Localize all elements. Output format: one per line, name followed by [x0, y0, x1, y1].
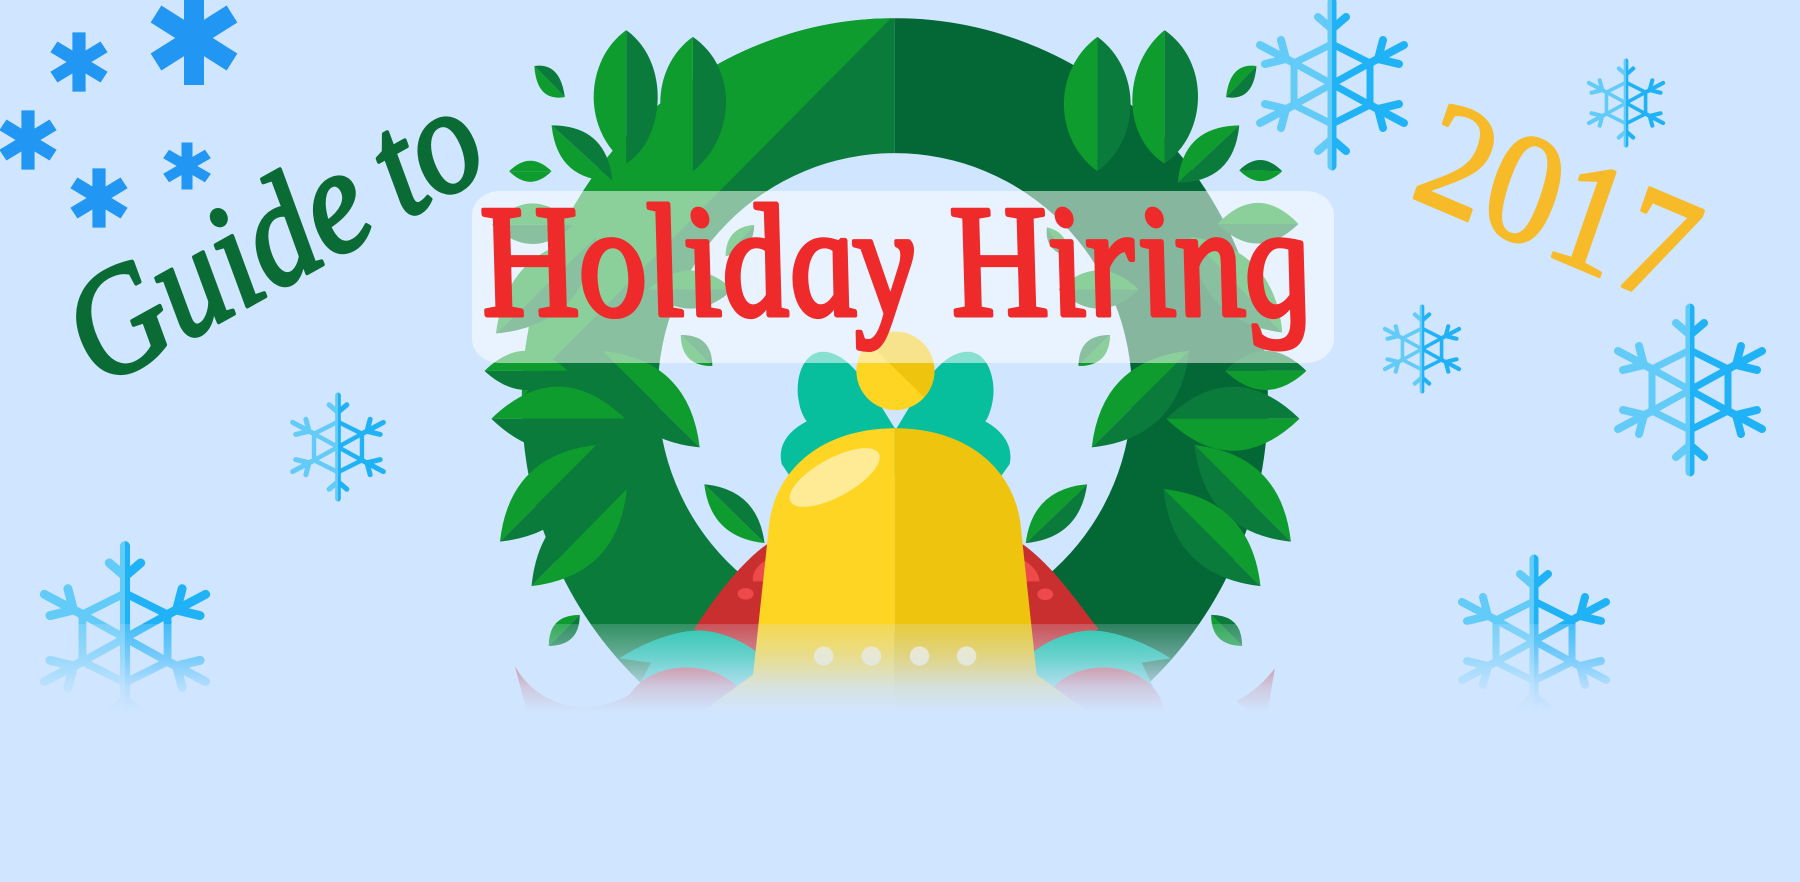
icon: snowflake top right — [1260, 2, 1404, 166]
wreath leaves left — [484, 30, 765, 646]
bottom fade — [0, 624, 1800, 882]
illustration: wreath with bell — [484, 18, 1306, 706]
icon: large asterisk — [156, 0, 232, 85]
heading: 2017: 2017 — [1408, 58, 1710, 347]
icon: asterisk far left — [3, 110, 53, 170]
red ornaments at bottom — [624, 668, 1163, 758]
title: Holiday Hiring: Holiday Hiring — [461, 172, 1324, 350]
bell top ball — [856, 332, 934, 410]
red fabric behind bell — [694, 543, 1099, 658]
bell highlight — [779, 437, 890, 518]
infographic canvas — [0, 0, 1766, 706]
title banner — [472, 191, 1334, 363]
icon: small asterisk — [166, 142, 208, 190]
red arcs at bottom — [515, 666, 1275, 746]
heading: Guide to: Guide to — [36, 54, 510, 417]
icon: snowflake left small — [293, 395, 383, 499]
wreath ring — [522, 18, 1268, 682]
bow — [781, 352, 1010, 476]
icon: asterisk snow cluster — [3, 0, 232, 228]
icon: asterisk top left — [54, 32, 104, 92]
teal wings — [619, 631, 1170, 718]
icon: asterisk lower — [74, 168, 124, 228]
icon: snowflake far top right small — [1589, 61, 1663, 145]
bell — [697, 428, 1093, 715]
icon: snowflake middle right small — [1385, 307, 1459, 391]
icon: snowflake bottom right — [1462, 559, 1606, 723]
bell dots — [814, 646, 976, 666]
icon: snowflake left large — [44, 546, 206, 730]
wreath leaves right — [1026, 30, 1306, 646]
icon: snowflake right large — [1618, 308, 1762, 472]
